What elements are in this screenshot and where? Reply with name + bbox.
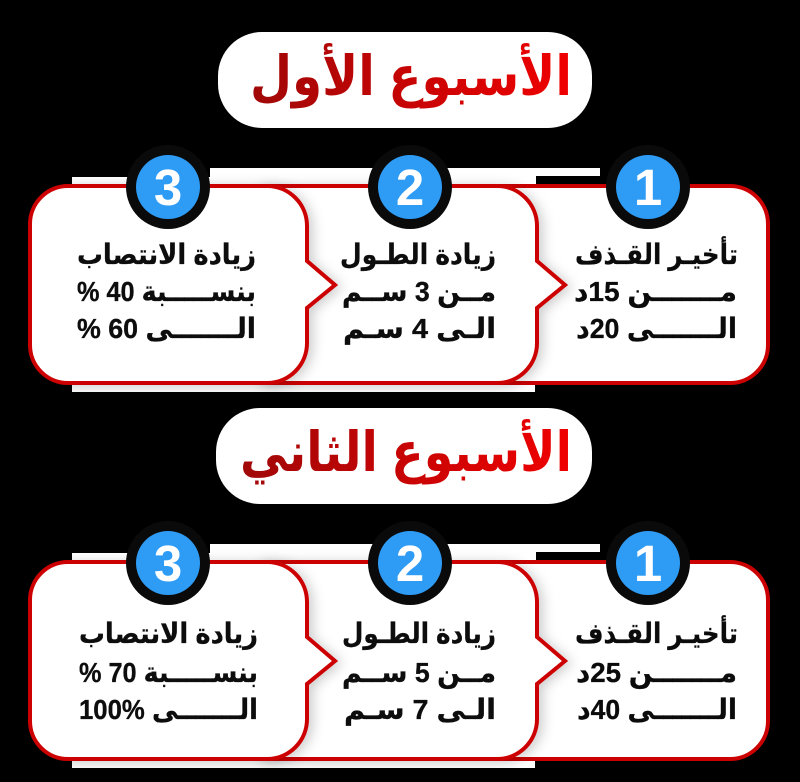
badge 1: 1: [634, 535, 662, 592]
heading: week two: [216, 408, 592, 504]
badge 1: 1: [634, 159, 662, 216]
card 1: ejaculation delay: الـــــــى 40د: [577, 694, 737, 725]
panel: week one cards: [30, 145, 768, 392]
card 3: erection increase: زيادة الانتصاب: [77, 239, 256, 271]
backing: [72, 544, 600, 768]
card 1: ejaculation delay: مـــــــن 25د: [576, 657, 737, 689]
badge 2: [368, 521, 452, 605]
card 2: length increase: مــن 3 ســم: [342, 276, 496, 308]
card 1: ejaculation delay: [300, 186, 768, 383]
badge 2: [368, 145, 452, 229]
card 2: length increase: الـى 4 سـم: [343, 313, 496, 345]
card 2: length increase: الـى 7 سـم: [344, 694, 496, 726]
badge 1: [606, 145, 690, 229]
card 1: ejaculation delay: مـــــــن 15د: [574, 276, 737, 308]
card 3: erection increase: [30, 562, 335, 759]
card 3: erection increase: الـــــــى %100: [79, 694, 258, 725]
badge 3: [126, 521, 210, 605]
heading: week one: الأسبوع الأول: [250, 43, 572, 109]
card 3: erection increase: [30, 186, 335, 383]
card 3: erection increase: بنســـــبة 70 %: [79, 657, 258, 688]
card 3: erection increase: زيادة الانتصاب: [79, 618, 258, 650]
backing: [72, 168, 600, 392]
badge 2: 2: [396, 159, 424, 216]
heading: week one: [218, 32, 592, 128]
card 2: length increase: [260, 186, 565, 383]
card 1: ejaculation delay: تأخيـر القـذف: [575, 615, 738, 650]
card 2: length increase: [260, 562, 565, 759]
panel: week two cards: [30, 521, 768, 768]
card 2: length increase: مــن 5 ســم: [342, 657, 496, 689]
badge 3: [126, 145, 210, 229]
card 1: ejaculation delay: [300, 562, 768, 759]
badge 3: 3: [154, 159, 182, 216]
badge 2: 2: [396, 535, 424, 592]
card 3: erection increase: بنســـــبة 40 %: [77, 276, 256, 307]
card 1: ejaculation delay: الـــــــى 20د: [576, 313, 737, 344]
heading: week two: الأسبوع الثاني: [240, 419, 572, 485]
card 2: length increase: زيادة الطـول: [342, 618, 496, 650]
card 3: erection increase: الـــــــى 60 %: [77, 313, 256, 344]
badge 1: [606, 521, 690, 605]
card 1: ejaculation delay: تأخيـر القـذف: [575, 236, 738, 271]
badge 3: 3: [154, 535, 182, 592]
card 2: length increase: زيادة الطـول: [340, 239, 496, 271]
